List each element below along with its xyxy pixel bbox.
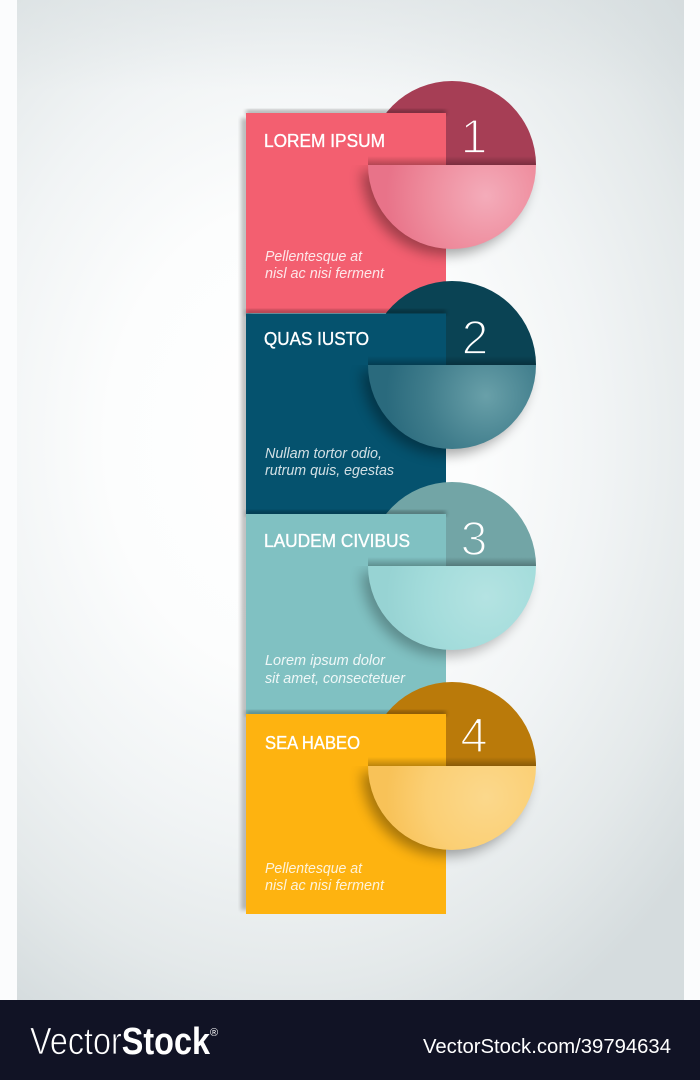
semicircle shadow [362,171,530,255]
semicircle shadow [362,572,530,656]
number 3: 3 [461,513,487,566]
semicircle: step 4 [368,766,536,850]
number 4: 4 [460,709,488,763]
semicircle shadow [362,772,530,856]
registered mark: ® [210,1027,218,1039]
step 4 block [246,682,536,914]
circle top: step 2 [368,281,536,365]
semicircle: step 3 [368,566,536,650]
column shadow [241,118,250,910]
circle top: step 4 [368,682,536,766]
circle top: step 3 [368,482,536,566]
number 2: 2 [462,312,488,365]
footer url: VectorStock.com/39794634 [423,1036,671,1058]
card: step 1 [246,113,446,313]
step 3 block [246,482,536,714]
description: step 3: Lorem ipsum dolor [265,653,386,669]
semicircle: step 2 [368,365,536,449]
heading: step 4: SEA HABEO [265,733,360,753]
card: step 2 [246,314,446,514]
card shadow [246,310,446,315]
description: step 4: Pellentesque at [265,861,363,877]
card shadow [246,110,446,115]
edge shadow [368,356,536,365]
description: step 1: Pellentesque at [265,249,363,265]
card: step 4 [246,714,446,914]
edge shadow [368,757,536,766]
description: step 3: sit amet, consectetuer [265,671,406,687]
description: step 4: nisl ac nisi ferment [265,878,385,894]
heading: step 3: LAUDEM CIVIBUS [264,531,410,551]
edge shadow [368,557,536,566]
semicircle shadow [362,371,530,455]
description: step 2: rutrum quis, egestas [265,463,394,479]
card shadow [246,711,446,716]
footer bar [0,1000,700,1080]
card: step 3 [246,514,446,714]
heading: step 2: QUAS IUSTO [264,329,369,349]
step 1 block [246,81,536,313]
step 2 block [246,281,536,514]
number 1: 1 [461,111,487,164]
card shadow [246,511,446,516]
description: step 1: nisl ac nisi ferment [265,266,385,282]
semicircle: step 1 [368,165,536,249]
description: step 2: Nullam tortor odio, [265,446,382,462]
footer logo: VectorStock [30,1021,211,1063]
edge shadow [368,156,536,165]
circle top: step 1 [368,81,536,165]
heading: step 1: LOREM IPSUM [264,131,385,151]
